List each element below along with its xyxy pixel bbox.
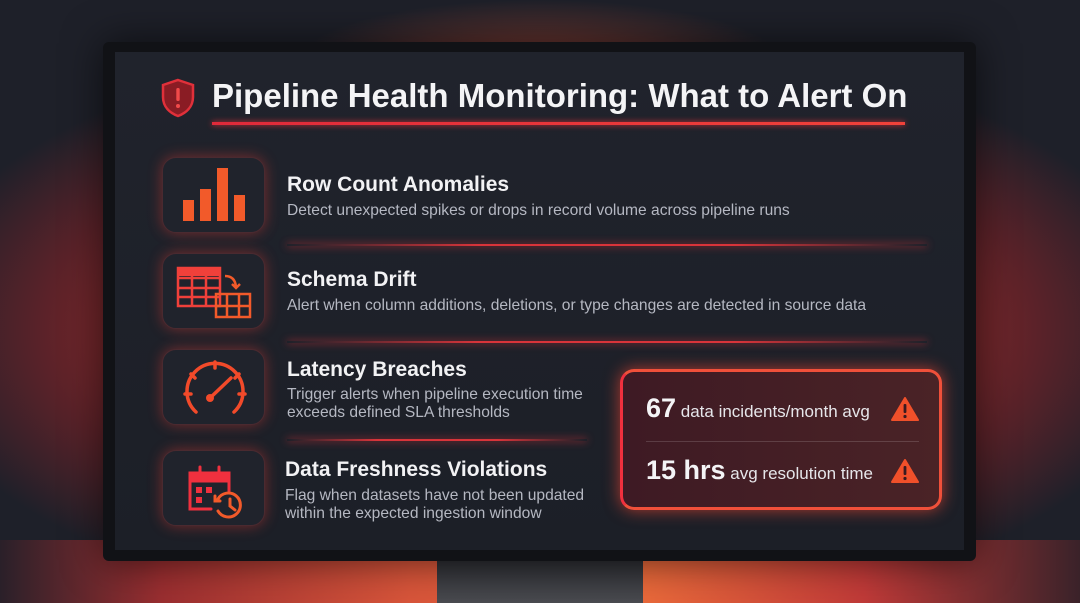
- icon: shield: [162, 78, 194, 118]
- text: freshness: Flag when datasets have not been updated: [285, 487, 584, 504]
- heading: freshness: Data Freshness Violations: [285, 458, 547, 481]
- monitor: [103, 42, 976, 561]
- text: freshness: [285, 487, 584, 522]
- heading: latency: Latency Breaches: [287, 358, 467, 381]
- icon: gauge: [162, 349, 265, 425]
- text: latency: [287, 386, 583, 421]
- icon: tables: [162, 253, 265, 329]
- callout: stats: 67 data incidents/month avg: [646, 393, 870, 423]
- icon: calendar clock: [162, 450, 265, 526]
- title: Pipeline Health Monitoring: What to Alert On: [212, 77, 907, 114]
- heading: schema drift: Schema Drift: [287, 268, 417, 291]
- text: freshness: within the expected ingestion window: [285, 505, 542, 522]
- text: latency: exceeds defined SLA thresholds: [287, 404, 510, 421]
- text: latency: Trigger alerts when pipeline execution time: [287, 386, 583, 403]
- heading: row count: Row Count Anomalies: [287, 173, 509, 196]
- callout: stats: 15 hrs avg resolution time: [646, 455, 873, 485]
- icon: bar chart: [162, 157, 265, 233]
- callout: stats: [620, 369, 942, 510]
- text: row count: Detect unexpected spikes or drops in record volume across pipeline runs: [287, 202, 790, 219]
- text: schema drift: Alert when column additions, deletions, or type changes are detected in source data: [287, 297, 866, 314]
